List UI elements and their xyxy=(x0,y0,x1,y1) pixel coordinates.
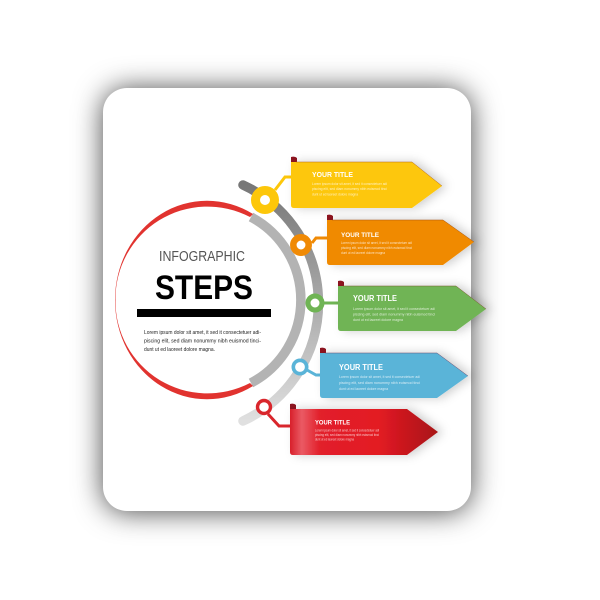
heading: steps: STEPS xyxy=(155,269,253,307)
step 5: red xyxy=(258,400,438,455)
step 2: orange: YOUR TITLE xyxy=(341,232,379,239)
step 3: green: piscing elit, sed diam nonummy nibh euismod tinci xyxy=(353,312,435,316)
heading: infographic: INFOGRAPHIC xyxy=(159,249,245,265)
step 2: orange xyxy=(293,215,474,265)
step 3: green: Lorem ipsum dolor sit amet, it sed it consectetuer adi xyxy=(353,307,435,311)
intro text: piscing elit, sed diam nonummy nibh euismod tinci- xyxy=(144,338,261,344)
step 5: red: Lorem ipsum dolor sit amet, it sed it consectetuer adi xyxy=(315,428,379,432)
step 1: yellow: Lorem ipsum dolor sit amet, it sed it consectetuer adi xyxy=(312,182,387,186)
step 3: green: YOUR TITLE xyxy=(353,294,397,303)
step 4: blue: piscing elit, sed diam nonummy nibh euismod tinci xyxy=(339,381,420,385)
step 2: orange: dunt ut ed laoreet dolore magna xyxy=(341,251,385,255)
red crescent xyxy=(115,201,253,399)
step 5: red: dunt ut ed laoreet dolore magna xyxy=(315,438,354,442)
step 3: green: dunt ut ed laoreet dolore magna xyxy=(353,318,403,322)
step 1: yellow: piscing elit, sed diam nonummy nibh euismod tinci xyxy=(312,187,387,191)
step 5: red: YOUR TITLE xyxy=(315,420,350,426)
divider bar xyxy=(137,309,271,317)
inner gray arc xyxy=(251,217,301,383)
step 3: green xyxy=(308,281,486,331)
step 1: yellow xyxy=(256,157,442,210)
outer gray arc xyxy=(243,185,318,421)
step 4: blue: dunt ut ed laoreet dolore magna xyxy=(339,387,388,391)
step 4: blue: Lorem ipsum dolor sit amet, it sed it consectetuer adi xyxy=(339,375,420,379)
panel: white card xyxy=(103,88,471,511)
intro text: Lorem ipsum dolor sit amet, it sed it consectetuer adi- xyxy=(144,330,261,336)
intro text: dunt ut ed laoreet dolore magna. xyxy=(144,347,215,353)
step 1: yellow: YOUR TITLE xyxy=(312,172,353,179)
step 4: blue xyxy=(293,348,468,398)
step 4: blue: YOUR TITLE xyxy=(339,363,383,372)
step 2: orange: Lorem ipsum dolor sit amet, it sed it consectetuer adi xyxy=(341,241,412,245)
step 2: orange: piscing elit, sed diam nonummy nibh euismod tinci xyxy=(341,246,412,250)
step 1: yellow: dunt ut ed laoreet dolore magna xyxy=(312,192,358,196)
intro text xyxy=(144,330,261,353)
step 5: red: piscing elit, sed diam nonummy nibh euismod tinci xyxy=(315,433,379,437)
